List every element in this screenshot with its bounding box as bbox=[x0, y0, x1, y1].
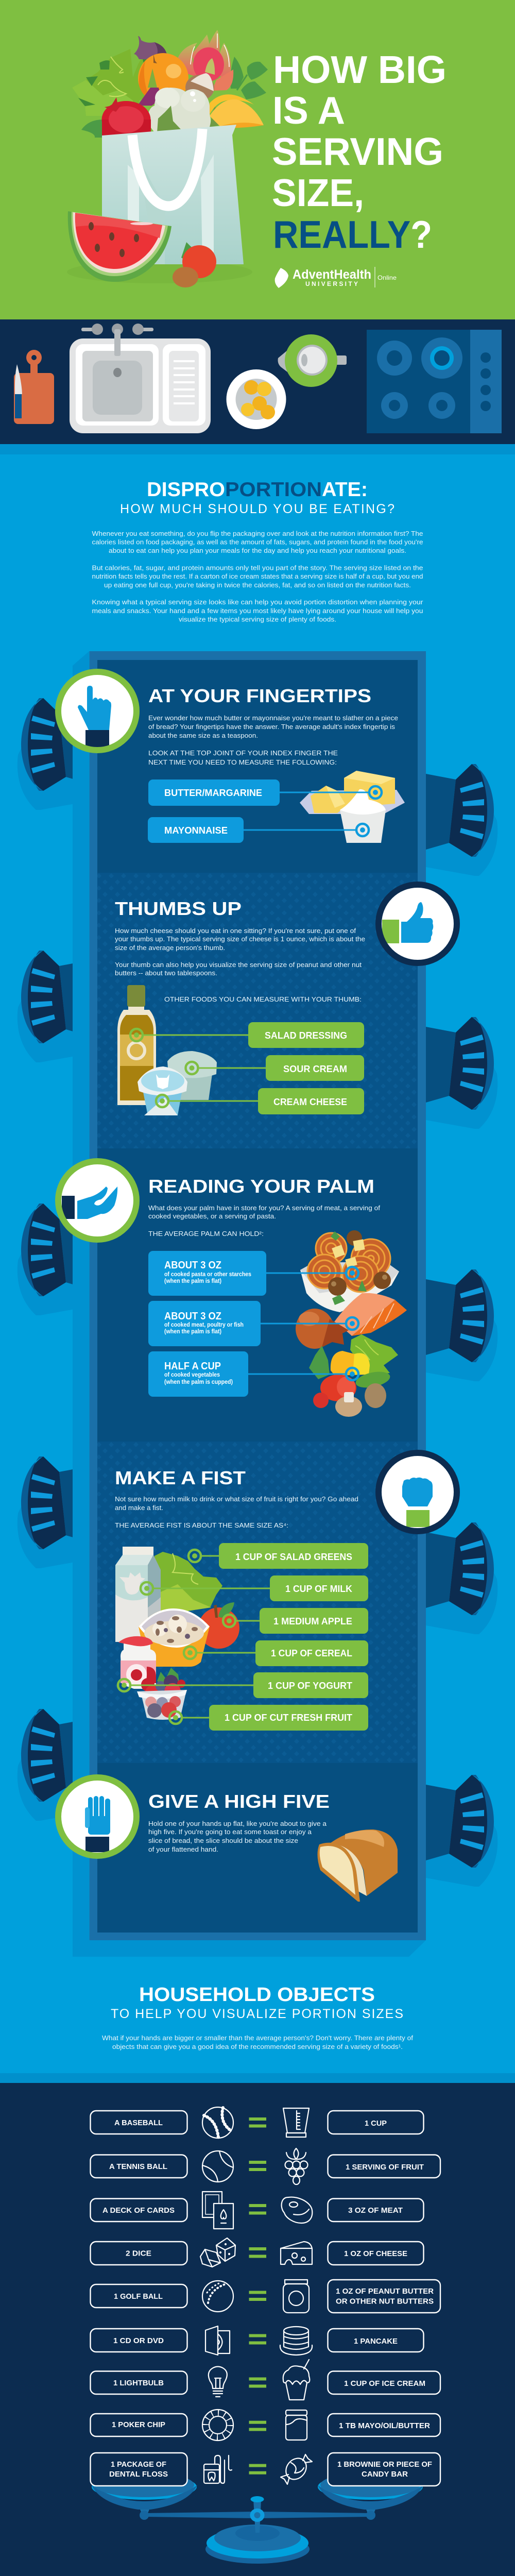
icon: pancake stack bbox=[280, 2327, 312, 2355]
row: baseball equals 1 cup bbox=[91, 2107, 423, 2138]
button: apple: 1 MEDIUM APPLE bbox=[273, 1616, 352, 1626]
icon: dice bbox=[200, 2238, 235, 2267]
row: deck of cards equals 3 oz of meat: A DECK OF CARDS bbox=[102, 2206, 175, 2215]
title: REALLY? bbox=[273, 213, 432, 256]
stool: right 1 bbox=[426, 764, 497, 876]
text block: and make a fist. bbox=[115, 1504, 163, 1512]
text block: introduction: meals and snacks. Your hand and a few items you most likely have lying around your house will help you bbox=[92, 607, 423, 615]
icon: thumbs up hand bbox=[379, 885, 457, 963]
row: lightbulb equals ice cream: 1 LIGHTBULB bbox=[113, 2379, 164, 2387]
illustration: balance scale bbox=[92, 2472, 423, 2564]
icon: sink bbox=[70, 324, 211, 433]
text block: of bread? Your fingertips have the answer. The average adult's index fingertip is bbox=[148, 723, 396, 731]
text block bbox=[115, 1495, 358, 1529]
button: cut fresh fruit: 1 CUP OF CUT FRESH FRUIT bbox=[225, 1712, 353, 1723]
icon: cd case bbox=[205, 2326, 230, 2355]
heading: disproportionate: ATE: bbox=[322, 479, 368, 501]
button: mayonnaise: MAYONNAISE bbox=[164, 825, 228, 836]
button: salad greens: 1 CUP OF SALAD GREENS bbox=[235, 1551, 352, 1562]
text block: of your flattened hand. bbox=[148, 1845, 218, 1853]
icon: ice cream bbox=[283, 2360, 310, 2400]
icon: measuring cup bbox=[283, 2108, 309, 2137]
text block: Your thumb can also help you visualize the serving size of peanut and other nut bbox=[115, 961, 362, 969]
row: golf ball equals peanut butter: OR OTHER NUT BUTTERS bbox=[336, 2297, 434, 2306]
icon: baseball bbox=[202, 2107, 233, 2138]
heading: THUMBS UP bbox=[115, 898, 242, 919]
icon: pointing hand bbox=[58, 672, 136, 750]
heading: disproportionate: HOW MUCH SHOULD YOU BE EATING? bbox=[120, 502, 394, 516]
text block: NEXT TIME YOU NEED TO MEASURE THE FOLLOWING: bbox=[148, 758, 337, 766]
button: sour cream: SOUR CREAM bbox=[283, 1063, 347, 1074]
icon: bowl of fruit bbox=[227, 369, 286, 429]
button: cream cheese bbox=[156, 1088, 364, 1114]
title: SERVING bbox=[272, 130, 443, 173]
icon: tennis ball bbox=[202, 2151, 233, 2182]
equals sign bbox=[249, 2247, 266, 2258]
equals sign bbox=[249, 2291, 266, 2301]
text block: household intro: objects that can give you a good idea of the recommended serving size of a variety of foods¹. bbox=[112, 2043, 403, 2050]
row: deck of cards equals 3 oz of meat: 3 OZ OF MEAT bbox=[348, 2206, 403, 2215]
text block: OTHER FOODS YOU CAN MEASURE WITH YOUR THUMB: bbox=[164, 995, 362, 1003]
icon: jar bbox=[283, 2280, 309, 2313]
title: HOW BIG bbox=[273, 48, 447, 91]
callout: pasta bbox=[148, 1251, 358, 1296]
logo: AdventHealth University Online: AdventHealth bbox=[293, 267, 371, 282]
row: cd equals pancake: 1 PANCAKE bbox=[354, 2337, 398, 2346]
button: salad greens bbox=[188, 1543, 368, 1569]
text block bbox=[148, 1820, 327, 1853]
button: apple bbox=[223, 1608, 368, 1634]
icon: cutting board and knife bbox=[14, 350, 54, 424]
text block: slice of bread, the slice should be about the size bbox=[148, 1837, 298, 1844]
icon: playing cards bbox=[202, 2192, 233, 2229]
button: milk bbox=[141, 1575, 368, 1601]
row: poker chip equals mayo/oil/butter: 1 TB MAYO/OIL/BUTTER bbox=[339, 2421, 430, 2430]
text block: butters -- about two tablespoons. bbox=[115, 969, 217, 977]
button: mayonnaise bbox=[148, 817, 369, 843]
heading: disproportionate: DISPRO bbox=[147, 479, 225, 501]
row: tennis ball equals 1 serving of fruit bbox=[91, 2148, 440, 2184]
text block: Not sure how much milk to drink or what size of fruit is right for you? Go ahead bbox=[115, 1495, 358, 1503]
row: baseball equals 1 cup: A BASEBALL bbox=[114, 2119, 163, 2127]
button: milk: 1 CUP OF MILK bbox=[285, 1583, 353, 1594]
text block: introduction: Knowing what a typical serving size looks like can help you avoid portion distortion when planning your bbox=[92, 598, 423, 606]
stool: right 2 bbox=[426, 1017, 497, 1129]
button: cereal bbox=[184, 1640, 368, 1666]
illustration: milk, greens, apple, cereal, yogurt, fruit bbox=[115, 1547, 239, 1720]
icon: stove top bbox=[367, 330, 502, 433]
section: at your fingertips bbox=[58, 672, 405, 843]
button: sour cream bbox=[185, 1055, 364, 1081]
heading: disproportionate: PORTION bbox=[225, 479, 322, 501]
text block: household intro bbox=[102, 2034, 413, 2050]
callout: vegetables: of cooked vegetables bbox=[164, 1371, 220, 1378]
heading: household objects: HOUSEHOLD OBJECTS bbox=[139, 1984, 375, 2006]
button: yogurt bbox=[118, 1672, 368, 1698]
callout: pasta: of cooked pasta or other starches bbox=[164, 1270, 251, 1278]
text block: introduction: about to eat can help you plan your meals for the day and help you reach your nutritional goals. bbox=[109, 547, 406, 554]
heading: AT YOUR FINGERTIPS bbox=[148, 685, 371, 706]
text block: What does your palm have in store for you? A serving of meat, a serving of bbox=[148, 1204, 380, 1212]
icon: open hand bbox=[58, 1777, 136, 1856]
row: cd equals pancake: 1 CD OR DVD bbox=[113, 2336, 164, 2345]
panel: table bbox=[73, 651, 426, 1957]
row: 2 dice equals 1 oz of cheese bbox=[91, 2238, 423, 2267]
panel: household objects bbox=[0, 2073, 515, 2576]
text block: How much cheese should you eat in one sitting? If you're not sure, put one of bbox=[115, 927, 356, 935]
button: salad dressing: SALAD DRESSING bbox=[265, 1030, 347, 1041]
callout: meat: (when the palm is flat) bbox=[164, 1328, 221, 1335]
icon: mayo jar bbox=[286, 2410, 307, 2440]
illustration: butter and mayonnaise bbox=[300, 771, 405, 843]
button: butter/margarine bbox=[148, 779, 382, 806]
text block: introduction: visualize the typical serving size of plenty of foods. bbox=[179, 616, 336, 623]
row: lightbulb equals ice cream: 1 CUP OF ICE CREAM bbox=[344, 2379, 425, 2388]
callout: meat bbox=[148, 1301, 358, 1346]
button: salad dressing bbox=[130, 1022, 364, 1048]
logo: AdventHealth University Online: Online bbox=[377, 274, 397, 281]
logo: AdventHealth University Online bbox=[275, 267, 397, 288]
illustration: pasta, salmon, chicken, vegetables bbox=[296, 1230, 407, 1417]
button: yogurt: 1 CUP OF YOGURT bbox=[268, 1680, 353, 1691]
stool: right 5 bbox=[426, 1775, 497, 1887]
equals sign bbox=[249, 2161, 266, 2171]
button: butter/margarine: BUTTER/MARGARINE bbox=[164, 787, 262, 798]
icon: meat bbox=[282, 2197, 312, 2223]
text block: about the same size as a teaspoon. bbox=[148, 732, 258, 739]
heading: READING YOUR PALM bbox=[148, 1176, 374, 1197]
heading: household objects: TO HELP YOU VISUALIZE PORTION SIZES bbox=[111, 2007, 403, 2021]
row: poker chip equals mayo/oil/butter bbox=[91, 2410, 440, 2441]
title: SIZE, bbox=[272, 171, 364, 214]
row: poker chip equals mayo/oil/butter: 1 POKER CHIP bbox=[112, 2420, 165, 2429]
text block: introduction: calories listed on food packaging, as well as the amount of fats, sugars, and protein found in the food you're bbox=[92, 538, 423, 546]
callout: vegetables bbox=[148, 1351, 358, 1397]
text block: Ever wonder how much butter or mayonnaise you're meant to slather on a piece bbox=[148, 714, 398, 722]
heading: MAKE A FIST bbox=[115, 1467, 246, 1488]
icon: cheese bbox=[281, 2242, 312, 2264]
logo: AdventHealth University Online: UNIVERSITY bbox=[305, 280, 358, 287]
row: dental floss equals brownie: CANDY BAR bbox=[362, 2470, 408, 2479]
icon: fist bbox=[379, 1453, 457, 1531]
icon: poker chip bbox=[202, 2410, 233, 2441]
section: make a fist bbox=[115, 1453, 457, 1731]
row: golf ball equals peanut butter: 1 OZ OF PEANUT BUTTER bbox=[336, 2287, 434, 2296]
stool: left 3 bbox=[18, 1204, 89, 1315]
section: thumbs up bbox=[115, 885, 457, 1115]
row: tennis ball equals 1 serving of fruit: A TENNIS BALL bbox=[109, 2162, 167, 2171]
callout: vegetables: HALF A CUP bbox=[164, 1361, 221, 1372]
panel: hero bbox=[0, 0, 515, 319]
text block: introduction: But calories, fat, sugar, and protein amounts only tell you part of the story. The serving size listed on the bbox=[92, 564, 423, 572]
equals sign bbox=[249, 2117, 266, 2128]
title bbox=[272, 48, 447, 256]
illustration: bottle and tubs bbox=[117, 985, 217, 1115]
text block: high five. If you're going to eat some toast or enjoy a bbox=[148, 1828, 312, 1836]
row: dental floss equals brownie: 1 PACKAGE OF bbox=[111, 2460, 166, 2469]
text block: Hold one of your hands up flat, like you're about to give a bbox=[148, 1820, 327, 1827]
stool: left 4 bbox=[18, 1456, 89, 1568]
row: golf ball equals peanut butter: 1 GOLF BALL bbox=[114, 2292, 163, 2301]
equals sign bbox=[249, 2464, 266, 2475]
callout: vegetables: (when the palm is cupped) bbox=[164, 1378, 233, 1385]
icon: candy bbox=[281, 2454, 312, 2484]
stool: left 1 bbox=[18, 698, 89, 810]
stool: right 3 bbox=[426, 1269, 497, 1381]
text block bbox=[148, 714, 398, 766]
button: cereal: 1 CUP OF CEREAL bbox=[271, 1648, 352, 1658]
heading: household objects bbox=[111, 1984, 403, 2021]
text block: household intro: What if your hands are bigger or smaller than the average person's? Don't worry. There are plenty of bbox=[102, 2034, 413, 2042]
row: golf ball equals peanut butter bbox=[91, 2280, 440, 2313]
equals sign bbox=[249, 2204, 266, 2214]
row: tennis ball equals 1 serving of fruit: 1 SERVING OF FRUIT bbox=[346, 2163, 424, 2172]
icon: golf ball bbox=[202, 2281, 233, 2312]
text block: THE AVERAGE PALM CAN HOLD²: bbox=[148, 1230, 264, 1238]
text block: introduction bbox=[92, 530, 423, 623]
text block: size of the average person's thumb. bbox=[115, 944, 225, 952]
heading: disproportionate bbox=[120, 479, 394, 516]
callout: pasta: ABOUT 3 OZ bbox=[164, 1260, 221, 1271]
text block: LOOK AT THE TOP JOINT OF YOUR INDEX FINGER THE bbox=[148, 749, 338, 757]
text block bbox=[115, 927, 365, 1003]
text block: introduction: nutrition facts tells you the rest. If a carton of ice cream states that a serving size is half of a cup, but you end bbox=[92, 572, 423, 580]
illustration: grocery bag with produce bbox=[67, 30, 268, 287]
icon: kettle bbox=[278, 334, 347, 387]
icon: grapes bbox=[285, 2148, 308, 2184]
row: baseball equals 1 cup: 1 CUP bbox=[365, 2119, 387, 2128]
row: cd equals pancake bbox=[91, 2326, 423, 2355]
text block: introduction: up eating one full cup, you're taking in twice the calories, fat, and so on listed on the nutrition facts. bbox=[104, 581, 411, 589]
text block: your thumbs up. The typical serving size of cheese is 1 ounce, which is about the bbox=[115, 935, 365, 943]
row: 2 dice equals 1 oz of cheese: 2 DICE bbox=[126, 2249, 151, 2258]
row: lightbulb equals ice cream bbox=[91, 2360, 440, 2400]
equals sign bbox=[249, 2421, 266, 2431]
row: dental floss equals brownie: DENTAL FLOSS bbox=[109, 2470, 168, 2479]
icon: cupped palm bbox=[58, 1161, 136, 1240]
button: cut fresh fruit bbox=[169, 1705, 368, 1731]
callout: pasta: (when the palm is flat) bbox=[164, 1277, 221, 1284]
section: reading your palm bbox=[58, 1161, 407, 1417]
row: dental floss equals brownie bbox=[91, 2453, 440, 2486]
row: deck of cards equals 3 oz of meat bbox=[91, 2192, 423, 2229]
section: give a high five bbox=[58, 1777, 398, 1902]
text block: introduction: Whenever you eat something, do you flip the packaging over and look at the nutrition information first? The bbox=[92, 530, 423, 537]
callout: meat: ABOUT 3 OZ bbox=[164, 1311, 221, 1322]
heading: GIVE A HIGH FIVE bbox=[148, 1791, 330, 1812]
row: dental floss equals brownie: 1 BROWNIE OR PIECE OF bbox=[337, 2460, 432, 2469]
callout: meat: of cooked meat, poultry or fish bbox=[164, 1321, 244, 1328]
icon: dental floss bbox=[204, 2455, 232, 2483]
button: cream cheese: CREAM CHEESE bbox=[273, 1096, 347, 1107]
row: 2 dice equals 1 oz of cheese: 1 OZ OF CHEESE bbox=[344, 2249, 407, 2258]
panel: kitchen band bbox=[0, 319, 515, 454]
text block: cooked vegetables, or a serving of pasta. bbox=[148, 1212, 276, 1220]
stool: left 2 bbox=[18, 951, 89, 1062]
title: IS A bbox=[272, 89, 345, 132]
stool: right 4 bbox=[426, 1522, 497, 1634]
equals sign bbox=[249, 2334, 266, 2344]
illustration: bread bbox=[317, 1829, 398, 1902]
equals sign bbox=[249, 2377, 266, 2387]
text block: THE AVERAGE FIST IS ABOUT THE SAME SIZE AS⁴: bbox=[115, 1521, 288, 1529]
text block bbox=[148, 1204, 380, 1238]
icon: lightbulb bbox=[209, 2367, 227, 2397]
stool: left 5 bbox=[18, 1709, 89, 1821]
